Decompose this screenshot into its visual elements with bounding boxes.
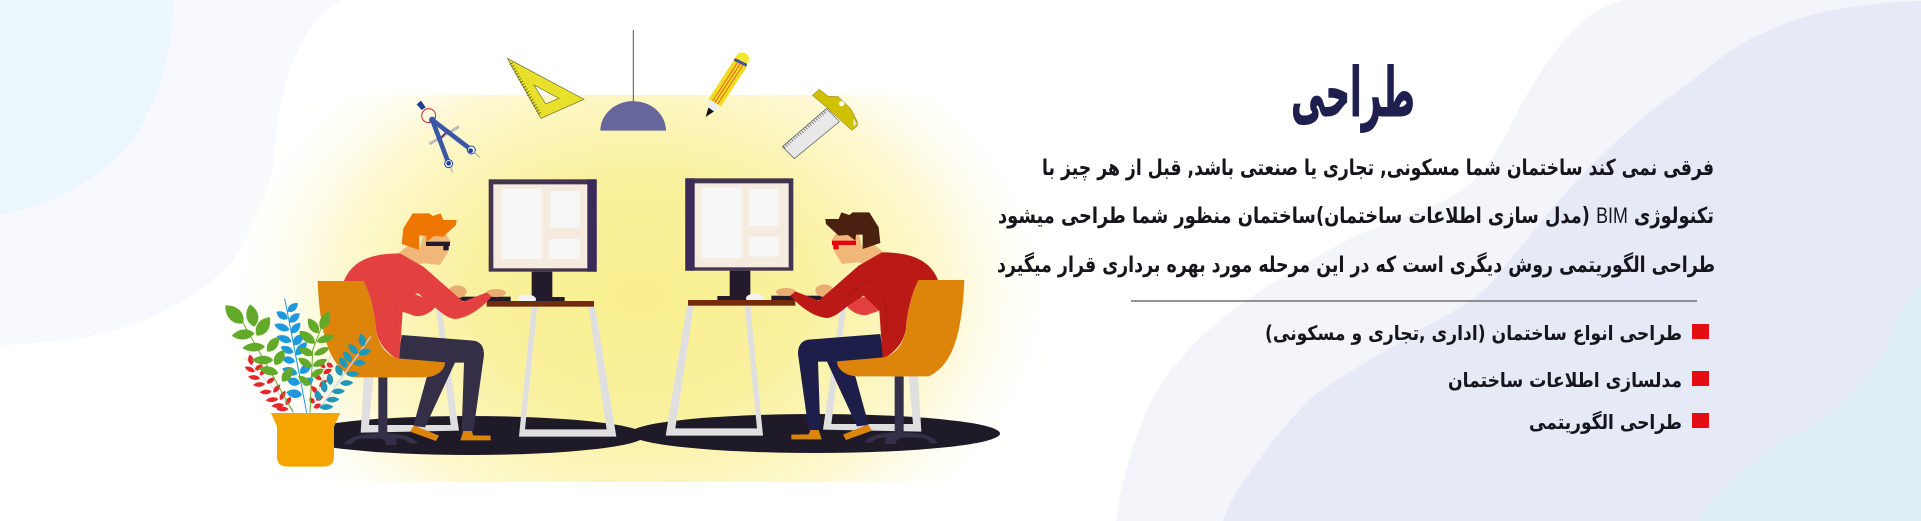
floor shadow: [295, 414, 1000, 455]
keyboard and mouse: [457, 295, 536, 304]
torso and arms: [790, 252, 938, 359]
head: [398, 213, 457, 265]
desk: [666, 300, 795, 436]
trousers: [398, 335, 484, 432]
green branches: [221, 301, 336, 413]
shoes: [410, 425, 491, 441]
head: [825, 212, 884, 264]
drawing tools and lamp: [417, 30, 857, 173]
divider: [1131, 300, 1697, 302]
monitor: [489, 179, 597, 301]
paragraph line 2: تکنولوژی BIM (مدل سازی اطلاعات ساختمان)ساختمان منظور شما طراحی میشود: [998, 203, 1714, 229]
torso and arms: [344, 253, 492, 360]
chair stem and base: [344, 377, 418, 445]
hands: [449, 285, 506, 298]
icon: compass: [417, 101, 480, 173]
paragraph line 3: طراحی الگوریتمی روش دیگری است که در این مرحله مورد بهره برداری قرار میگیرد: [997, 251, 1715, 278]
bullet list: [1265, 321, 1709, 434]
chair frame: [361, 308, 459, 433]
icon: T-square ruler: [782, 89, 857, 159]
intro paragraph: [997, 156, 1715, 278]
keyboard and mouse: [746, 294, 825, 303]
monitor: [685, 178, 793, 300]
blue fern: [273, 298, 315, 413]
left designer at desk: [318, 179, 616, 445]
teal fern: [313, 333, 372, 410]
icon: set square: [507, 58, 584, 118]
chair stem and base: [864, 376, 938, 444]
bullet 2: مدلسازی اطلاعات ساختمان: [1448, 368, 1682, 392]
red fern: [244, 354, 334, 411]
background blobs: bottom right: [1116, 0, 1921, 521]
yellow light glow: [227, 95, 1057, 482]
icon: pencil: [706, 52, 749, 117]
hands: [776, 284, 833, 297]
potted plant: [221, 298, 372, 467]
bullet 1: طراحی انواع ساختمان (اداری ,تجاری و مسکونی): [1265, 321, 1682, 345]
icon: pendant lamp: [600, 30, 666, 131]
right designer at desk: [666, 178, 964, 444]
background blobs: top left: [0, 0, 343, 345]
bullet 3: طراحی الگوریتمی: [1529, 410, 1682, 434]
chair seat and back: [837, 280, 964, 376]
pot: [271, 413, 340, 467]
trousers: [798, 334, 884, 431]
chair frame: [823, 307, 921, 432]
desk: [487, 301, 616, 437]
chair seat and back: [318, 281, 445, 377]
shoes: [791, 424, 872, 440]
title: طراحی: [1291, 54, 1415, 133]
paragraph line 1: فرقی نمی کند ساختمان شما مسکونی, تجاری یا صنعتی باشد, قبل از هر چیز با: [1042, 156, 1714, 181]
